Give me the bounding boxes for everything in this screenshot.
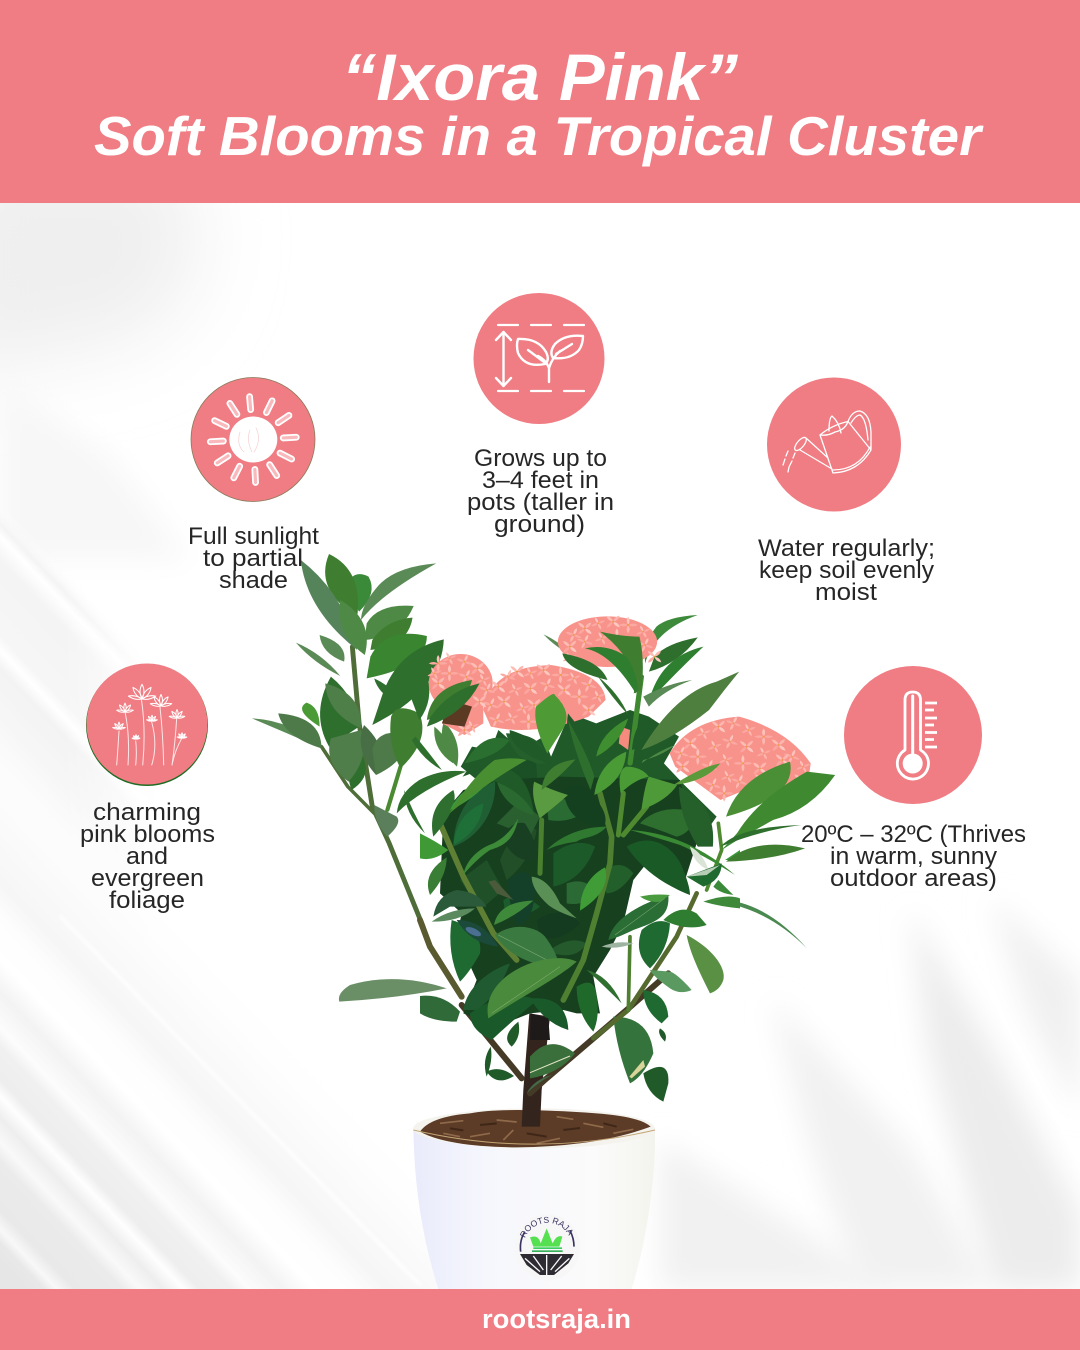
label: watering (758, 535, 935, 606)
icon: sun (191, 378, 315, 502)
label: watering: Water regularly; (758, 535, 935, 562)
label: sunlight: Full sunlight (188, 523, 319, 550)
label: blooms: evergreen (91, 865, 204, 892)
title (94, 40, 984, 167)
title: “Ixora Pink” (342, 40, 738, 114)
label: sunlight (188, 523, 319, 594)
icon: thermometer (844, 666, 982, 804)
feature: sunlight (188, 378, 319, 594)
feature: watering (758, 378, 935, 606)
logo sticker (520, 1216, 575, 1275)
central dense foliage (420, 777, 740, 1040)
label: temperature: in warm, sunny (830, 843, 998, 870)
icon: watering can (767, 378, 901, 512)
footer website text: rootsraja.in (482, 1304, 631, 1334)
logo sticker: ROOTS RAJA (520, 1216, 572, 1238)
lower stems and leaves (339, 973, 668, 1127)
label: temperature (801, 821, 1026, 892)
label: temperature: 20ºC – 32ºC (Thrives (801, 821, 1026, 848)
top leaves over blooms (427, 632, 835, 862)
label: temperature: outdoor areas) (830, 865, 997, 892)
icon: plant height (474, 293, 604, 424)
label: blooms: foliage (109, 887, 185, 914)
label: blooms: and (126, 843, 168, 870)
label: height: ground) (494, 511, 585, 538)
title: Soft Blooms in a Tropical Cluster (94, 105, 984, 167)
feature: temperature (801, 666, 1026, 892)
icon: flowers (86, 664, 208, 786)
feature: height (467, 293, 614, 538)
label: watering: keep soil evenly (759, 557, 935, 584)
pot (413, 1108, 656, 1289)
footer banner (0, 1289, 1080, 1350)
label: height: 3–4 feet in (482, 467, 599, 494)
bloom clusters and top leaves (424, 615, 835, 862)
label: height: Grows up to (474, 445, 607, 472)
plant illustration (252, 554, 854, 1289)
inner shaded leaves (500, 828, 537, 880)
label: sunlight: shade (219, 567, 288, 594)
label: blooms (80, 799, 215, 914)
label: blooms: charming (93, 799, 201, 826)
label: watering: moist (815, 579, 877, 606)
header banner (0, 0, 1080, 203)
feature: blooms (80, 664, 215, 914)
label: height: pots (taller in (467, 489, 614, 516)
label: blooms: pink blooms (80, 821, 215, 848)
upper-left branch and back foliage (252, 554, 807, 948)
label: sunlight: to partial (203, 545, 303, 572)
label: height (467, 445, 614, 538)
blooms (424, 615, 813, 803)
